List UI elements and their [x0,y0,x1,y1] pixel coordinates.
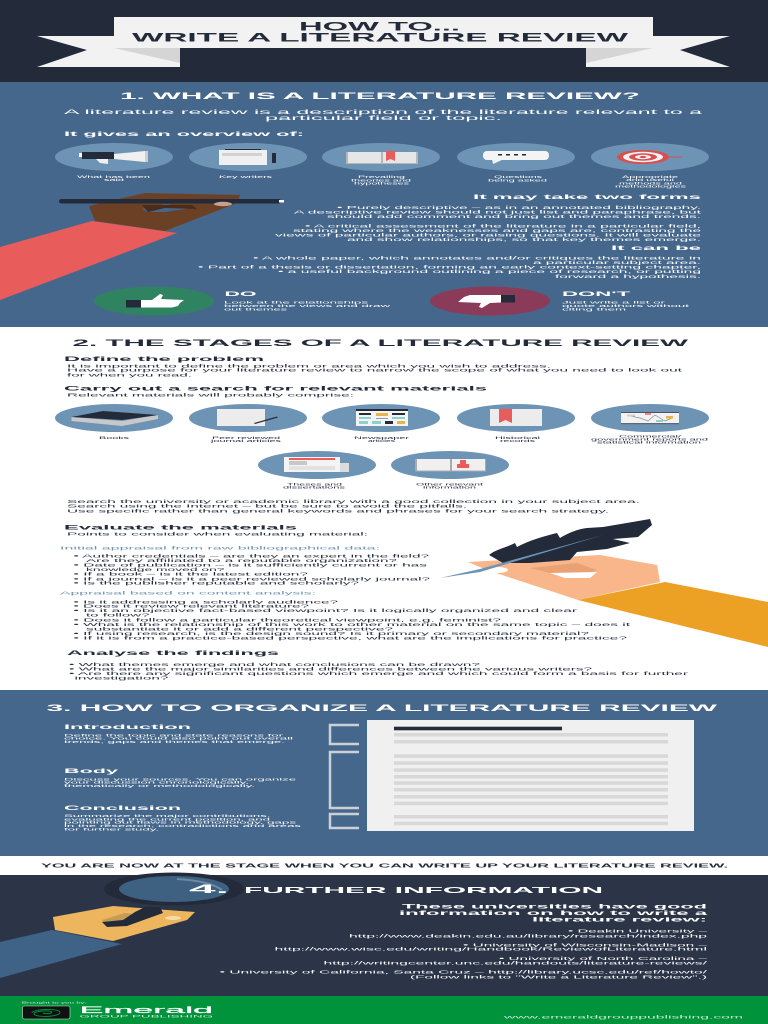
text block: analyse the findings: • Are there any significant questions which emerge and which could form a basis for further [69,671,690,676]
panel: section 4 further information [0,872,768,996]
icon: open book [322,143,440,171]
text block: evaluate the materials: Points to consider when evaluating material: [67,531,368,536]
text block: university links: • University of California, Santa Cruz – http://library.ucsc.edu/ref/howto/ [220,970,710,975]
text block: initial appraisal: • If a journal – is it a peer reviewed scholarly journal? [74,576,432,581]
title: HOW TO... [299,20,460,34]
callout: do: Look at the relationships [224,301,369,305]
text block: it can be: It can be [611,245,703,252]
text block: university links: http://writingcenter.unc.edu/handouts/literature-reviews/ [324,960,710,965]
text block: university links: http://www.deakin.edu.au/library/research/index.php [349,933,709,938]
captions: materials: statistical information [597,440,702,444]
text block: analyse the findings: • What themes emerge and what conclusions can be drawn? [69,662,482,667]
text block: body: Discuss your sources. You can organize [64,777,296,781]
text block: it can be: forward a hypothesis. [555,274,701,279]
heading: section 4: FURTHER INFORMATION [244,886,603,895]
captions: materials: dissertations [283,486,346,490]
icon: thumbs down [430,286,550,316]
text block: analyse the findings [67,650,690,681]
text block: universities intro: These universities have good [402,904,708,911]
captions: materials: government reports and [591,437,709,441]
captions: materials: Books [99,436,130,440]
captions: materials: Historical [495,436,541,440]
logo: emerald wordmark: Emerald [80,1005,213,1016]
text block: universities intro [399,904,709,924]
text block: body [64,768,296,788]
text block: universities intro: information on how to write a [399,910,709,917]
icon: megaphone [55,143,173,171]
callout: write up banner [0,856,768,875]
text block: body: thematically or methodologically. [64,784,255,788]
logo: emerald icon [22,1006,70,1019]
captions: materials: records [500,439,536,443]
text block: it can be: • A whole paper, which annotates and/or critiques the literature in [253,256,703,261]
text block: conclusion: Conclusion [64,805,182,812]
captions: overview icons: said [104,178,125,182]
text block: search advice [67,499,640,513]
captions: overview icons: methodologies [615,184,687,188]
text block: initial appraisal: Initial appraisal from raw bibliographical data: [60,545,380,550]
captions: materials [99,434,709,490]
captions: overview icons: Key writers [219,175,273,179]
captions: materials: articles [368,439,396,443]
title [132,20,630,45]
text: website: www.emeraldgrouppublishing.com [504,1015,744,1020]
callout: dont: DON'T [562,291,630,298]
captions: overview icons: Appropriate [622,175,679,179]
panel: header [0,0,768,82]
text block: it can be: • a useful background outlining a piece of research, or putting [278,269,703,274]
text block: define the problem: Define the problem [64,356,265,363]
logo: emerald wordmark: GROUP PUBLISHING [80,1015,215,1019]
icon: notepad [189,143,307,171]
captions: overview icons: methods and [619,182,683,186]
icon: historical record [457,404,575,432]
text block: define the problem: It is important to define the problem or area which you wish to address. [67,363,551,368]
captions: materials: Newspaper [354,436,412,440]
text block: conclusion: for further study. [64,828,159,832]
text block: two forms: should add comment and bring out themes and trends. [327,214,701,219]
illustration: hand with quill [440,519,768,647]
icon: books [55,404,173,432]
text block: university links: (Follow links to "Write a Literature Review".) [410,974,709,979]
text block: initial appraisal: • If a book – is it the latest edition? [74,572,310,577]
text block: university links: http://www.wisc.edu/writing/Handbook/ReviewofLiterature.html [274,947,707,952]
callout: dont: quote authors without [562,304,689,308]
icon: journal article [189,404,307,432]
icon: speech bubble [457,143,575,171]
text block: two forms: and show relationships, so that key themes emerge. [347,237,701,242]
captions: overview icons: Questions [494,175,543,179]
heading: section 4 [189,882,603,896]
brackets: document parts [330,725,359,828]
text block: analyse the findings: investigation? [74,676,170,681]
text block: content appraisal: • Does it follow a particular theoretical viewpoint, e.g. feminist? [74,617,503,622]
banner ribbon [37,17,730,67]
text block: search advice: Use specific rather than general keywords and phrases for your search strategy. [67,508,609,513]
text block: introduction: Introduction [64,724,192,731]
captions: overview icons: theories and [351,178,412,182]
text block: initial appraisal: knowledge moved on? [86,567,226,572]
text block: define the problem [64,356,685,377]
text block: two forms: • A critical assessment of the literature in a particular field, [305,224,701,229]
text block: introduction: Define the topic and state reasons for [64,733,286,737]
callout: dont [562,291,689,311]
text block: introduction: choice. You could also point out overall [64,737,294,741]
panel: section 2 stages [0,327,768,690]
intro text: A literature review is a description of the literature relevant to a [64,109,704,116]
text block: initial appraisal: Are they affiliated to a reputable organization? [86,558,399,563]
panel: section 1 what is a literature review [0,82,768,327]
text block: university links: • Deakin University – [568,929,709,934]
heading: section 4: 4. [189,882,229,896]
text block: content appraisal: • Does it review relevant literature? [74,604,311,609]
text block: two forms: • Purely descriptive – as in an annotated bibliography. [337,205,701,210]
text block: two forms: views of particular authors, or raising questions. It will evaluate [275,233,703,238]
text block: evaluate the materials [64,524,368,536]
captions: overview icons: What has been [77,175,151,179]
text block: content appraisal: • If using research, is the design sound? Is it primary or secondary material? [74,631,591,636]
icon: thumbs up [94,286,214,316]
text block: introduction: trends, gaps and themes that emerge. [64,740,285,744]
text block: it can be [198,245,703,279]
text block: search advice: Search the university or academic library with a good collection in your subject area. [67,499,640,504]
title: WRITE A LITERATURE REVIEW [132,31,630,45]
panel: section 3 organize [0,690,768,856]
captions: materials: Other relevant [416,483,483,487]
text block: body: Body [64,768,120,775]
icon: target [591,143,709,171]
captions: overview icons: hypotheses [354,182,410,186]
text block: content appraisal: substantiate it or add a different perspective? [86,627,395,632]
text block: initial appraisal: • Date of publication – is it sufficiently current or has [74,563,430,568]
text block: university links: • University of Wisconsin-Madison – [463,942,709,947]
callout: write up banner: YOU ARE NOW AT THE STAGE WHEN YOU CAN WRITE UP YOUR LITERATURE REVIEW. [41,863,730,869]
illustration: hand holding pen [0,193,284,300]
text block: conclusion: evaluating the current position, and [64,817,270,821]
text block: search for materials [64,385,489,397]
callout: dont: Just write a list or [562,301,668,305]
text block: universities intro: literature review: [532,917,707,924]
icon: statistical chart [591,404,709,432]
captions: overview icons: Prevailing [358,175,406,179]
text block: two forms: A descriptive review should not just list and paraphrase, but [294,210,704,215]
text block: initial appraisal: • Is the publisher reputable and scholarly? [74,581,361,586]
logo: emerald wordmark [80,1005,215,1019]
text block: content appraisal: to follow? [86,613,151,618]
icon: other information [391,451,509,479]
text block: conclusion: in the research, contradictions and areas [64,824,302,828]
captions: materials: Theses and [287,483,343,487]
text block: content appraisal: • Is it an objective fact-based viewpoint? Is it logically organized and clear [74,608,579,613]
text block: initial appraisal [60,545,432,586]
captions: materials: Peer reviewed [212,436,281,440]
illustration: hand with magnifier [0,872,244,978]
text block: content appraisal: • Is it addressing a scholarly audience? [74,599,340,604]
heading: section 1: 1. WHAT IS A LITERATURE REVIEW? [120,91,641,101]
callout: dont: citing them [562,307,627,311]
text block: university links: • University of North Carolina – [499,956,709,961]
text block: two forms: It may take two forms [473,194,703,201]
callout: do: DO [224,291,257,298]
text block: body: your discussion chronologically, [64,781,249,785]
text block: content appraisal: • What is the relationship of this work to other material on the same topic – does it [74,622,633,627]
heading: section 3: 3. HOW TO ORGANIZE A LITERATURE REVIEW [46,703,718,713]
text block: university links [220,929,710,979]
text block: it can be: a particular subject area. [533,260,701,265]
document page [367,720,694,831]
intro text [64,109,704,122]
text block: initial appraisal: • Author credentials – are they an expert in the field? [74,553,431,558]
text block: search advice: Search using the Internet – but be sure to avoid the pitfalls. [67,504,467,509]
subheading: overview: It gives an overview of: [64,131,304,138]
text block: conclusion [64,805,302,832]
text block: two forms: stating where the weaknesses and gaps are, contrasting the [293,228,703,233]
text block: search for materials: Carry out a search for relevant materials [64,385,489,392]
captions: overview icons: being asked [488,178,548,182]
text block: it can be: • Part of a thesis or dissertation, forming an early context-setting chapter, [198,265,701,270]
captions: materials: journal articles [208,439,282,443]
text block: conclusion: pointing out flaws in methodology, gaps [64,821,297,825]
text block: analyse the findings: • What are the major similarities and differences between the various writers? [69,667,594,672]
text block: content appraisal: Appraisal based on content analysis: [60,591,316,596]
text: brought to you by: Brought to you by: [22,1000,87,1004]
icon: newspaper [322,404,440,432]
text block: analyse the findings: Analyse the findings [67,650,280,657]
icon: theses [258,451,376,479]
text block: evaluate the materials: Evaluate the materials [64,524,298,531]
text block: search for materials: Relevant materials will probably comprise: [67,392,354,397]
callout: do: out themes [224,307,288,311]
heading: section 2: 2. THE STAGES OF A LITERATURE REVIEW [72,338,689,348]
captions: overview icons [77,175,687,188]
panel: footer [0,996,768,1024]
captions: materials: information [423,486,477,490]
text block: content appraisal: • If it is from a practice-based perspective, what are the implications for practice? [74,636,629,641]
text block: two forms [275,194,704,242]
callout: do [224,291,392,311]
intro text: particular field or topic. [265,115,503,122]
captions: overview icons: and useful [626,178,675,182]
captions: materials: Commercial/ [619,434,681,438]
text block: define the problem: Have a purpose for your literature review to narrow the scope of what you need to look out [67,368,685,373]
text block: conclusion: Summarize the major contributions, [64,814,271,818]
text block: content appraisal [60,591,633,641]
text block: introduction [64,724,294,744]
text block: define the problem: for when you read. [67,372,192,377]
callout: do: between the views and draw [224,304,392,308]
